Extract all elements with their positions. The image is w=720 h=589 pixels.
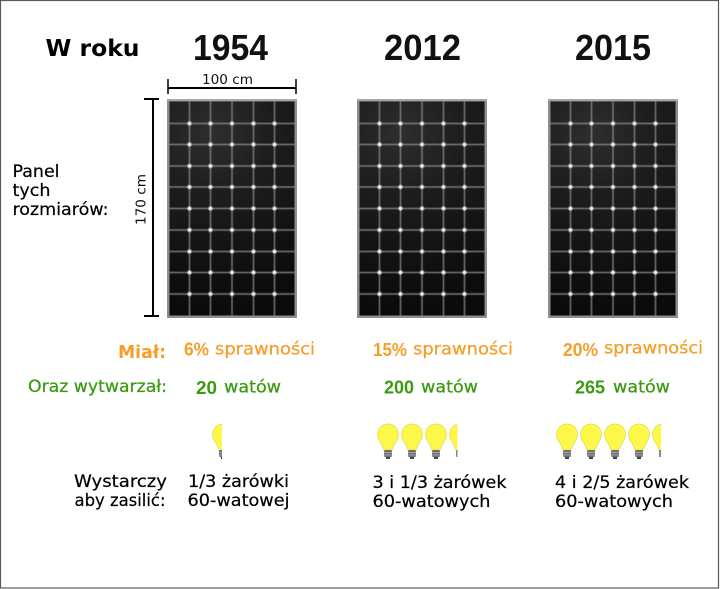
text: bulbs 1954: 1/3 żarówki bbox=[188, 472, 289, 491]
label: efficiency: Miał: bbox=[118, 342, 166, 363]
power 2012: 200 bbox=[384, 376, 414, 398]
label: enough to power: Wystarczy bbox=[74, 472, 167, 491]
year heading: 1954: 1954 bbox=[193, 27, 268, 68]
power 2012 bbox=[384, 376, 478, 398]
year heading: 2015: 2015 bbox=[575, 27, 651, 68]
label: panel size: rozmiarów: bbox=[12, 200, 108, 219]
icon: bulbs 2012 bbox=[377, 424, 458, 459]
power 1954: watów bbox=[224, 378, 281, 396]
text: bulbs 2015: 4 i 2/5 żarówek bbox=[555, 473, 689, 492]
solar panel 2015 bbox=[548, 99, 678, 318]
efficiency 2015: sprawności bbox=[604, 338, 703, 358]
efficiency 1954: 6% bbox=[184, 338, 209, 360]
label: panel size: Panel bbox=[12, 162, 60, 181]
width dimension: 100 cm bbox=[168, 72, 296, 94]
heading: W roku: W roku bbox=[46, 34, 140, 62]
efficiency 1954: sprawności bbox=[215, 340, 315, 358]
power 2012: watów bbox=[421, 378, 478, 396]
solar panel 2012 bbox=[357, 99, 487, 318]
height dimension: 170 cm bbox=[134, 99, 159, 316]
text: bulbs 2012: 60-watowych bbox=[372, 492, 490, 511]
power 2015 bbox=[575, 376, 670, 398]
power 1954: 20 bbox=[196, 377, 217, 398]
text: bulbs 1954: 60-watowej bbox=[188, 491, 290, 510]
power 2015: watów bbox=[613, 378, 670, 396]
power 1954 bbox=[196, 377, 281, 398]
height dimension: 170 cm: 170 cm bbox=[134, 174, 150, 225]
efficiency 2012: 15% bbox=[373, 339, 407, 360]
text: bulbs 2015: 60-watowych bbox=[555, 492, 673, 511]
year heading: 2012: 2012 bbox=[384, 27, 461, 68]
power 2015: 265 bbox=[575, 376, 605, 398]
text: bulbs 2012: 3 i 1/3 żarówek bbox=[372, 473, 507, 492]
solar panel 1954 bbox=[167, 99, 297, 318]
efficiency 2015 bbox=[563, 338, 703, 360]
efficiency 2012: sprawności bbox=[413, 340, 513, 358]
label: enough to power: aby zasilić: bbox=[74, 491, 166, 510]
label: panel size: tych bbox=[12, 181, 50, 200]
icon: bulbs 1954 bbox=[212, 424, 222, 459]
icon: bulbs 2015 bbox=[556, 424, 674, 459]
width dimension: 100 cm: 100 cm bbox=[202, 72, 253, 88]
efficiency 2012 bbox=[373, 339, 513, 360]
efficiency 2015: 20% bbox=[563, 339, 598, 360]
efficiency 1954 bbox=[184, 338, 315, 360]
label: power output: Oraz wytwarzał: bbox=[28, 377, 167, 396]
